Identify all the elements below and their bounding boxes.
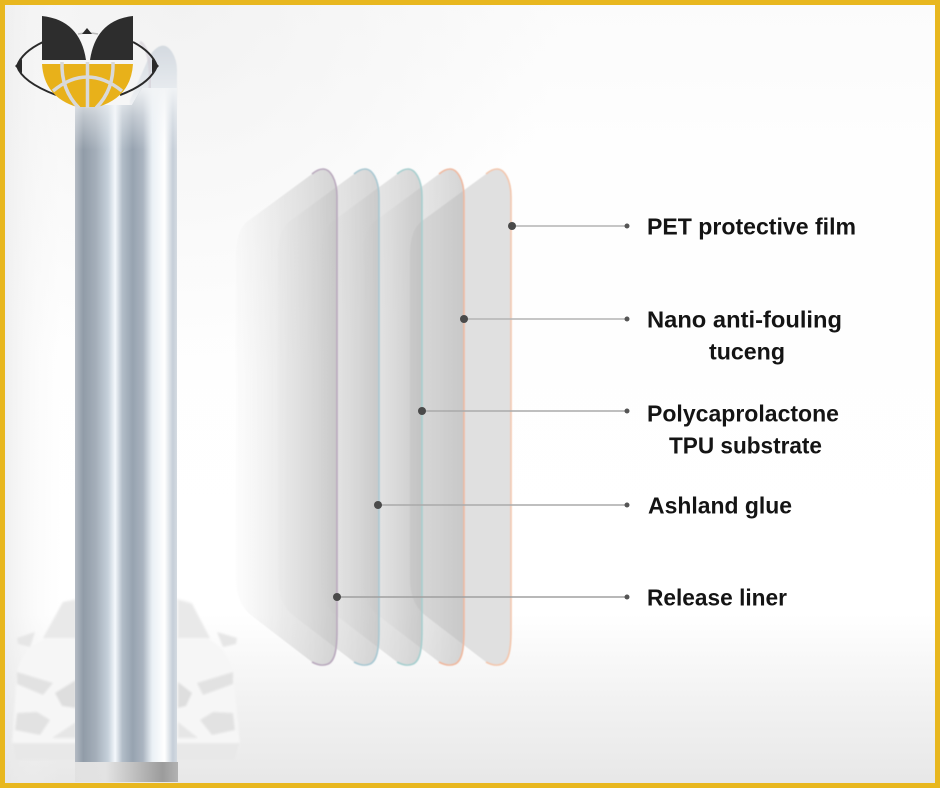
film roll — [75, 42, 178, 782]
callout: Nano anti-fouling tuceng: Nano anti-fouling — [647, 306, 842, 332]
faded car behind the roll — [12, 597, 240, 760]
callout: Polycaprolactone TPU substrate: TPU substrate — [669, 432, 822, 458]
layer: nano anti-fouling coating — [363, 169, 464, 665]
callout: PET protective film: PET protective film — [647, 214, 856, 240]
callout: Release liner: Release liner — [647, 584, 787, 610]
roll body — [75, 88, 177, 762]
roll top fade — [75, 88, 177, 150]
logo wing right — [90, 16, 133, 60]
callout: Polycaprolactone TPU substrate — [418, 400, 839, 458]
icon: globe and wings logo — [15, 16, 159, 108]
layer: PET protective film — [410, 169, 511, 665]
callout: Nano anti-fouling tuceng: tuceng — [709, 338, 785, 364]
roll shadow — [75, 762, 178, 782]
layer: Ashland glue — [278, 169, 379, 665]
roll wrap highlight — [140, 42, 150, 90]
logo globe — [42, 64, 133, 107]
callout: Release liner — [333, 584, 787, 610]
roll shoulder — [130, 46, 177, 110]
layer: TPU substrate — [321, 169, 422, 665]
callout: Nano anti-fouling tuceng — [460, 306, 842, 364]
callout: Polycaprolactone TPU substrate: Polycaprolactone — [647, 400, 839, 426]
layer: release liner — [236, 169, 337, 665]
callout: PET protective film — [508, 214, 856, 240]
callout: Ashland glue: Ashland glue — [648, 492, 792, 518]
film layers — [236, 169, 511, 665]
logo wing left — [42, 16, 86, 60]
callout: Ashland glue — [374, 492, 792, 518]
